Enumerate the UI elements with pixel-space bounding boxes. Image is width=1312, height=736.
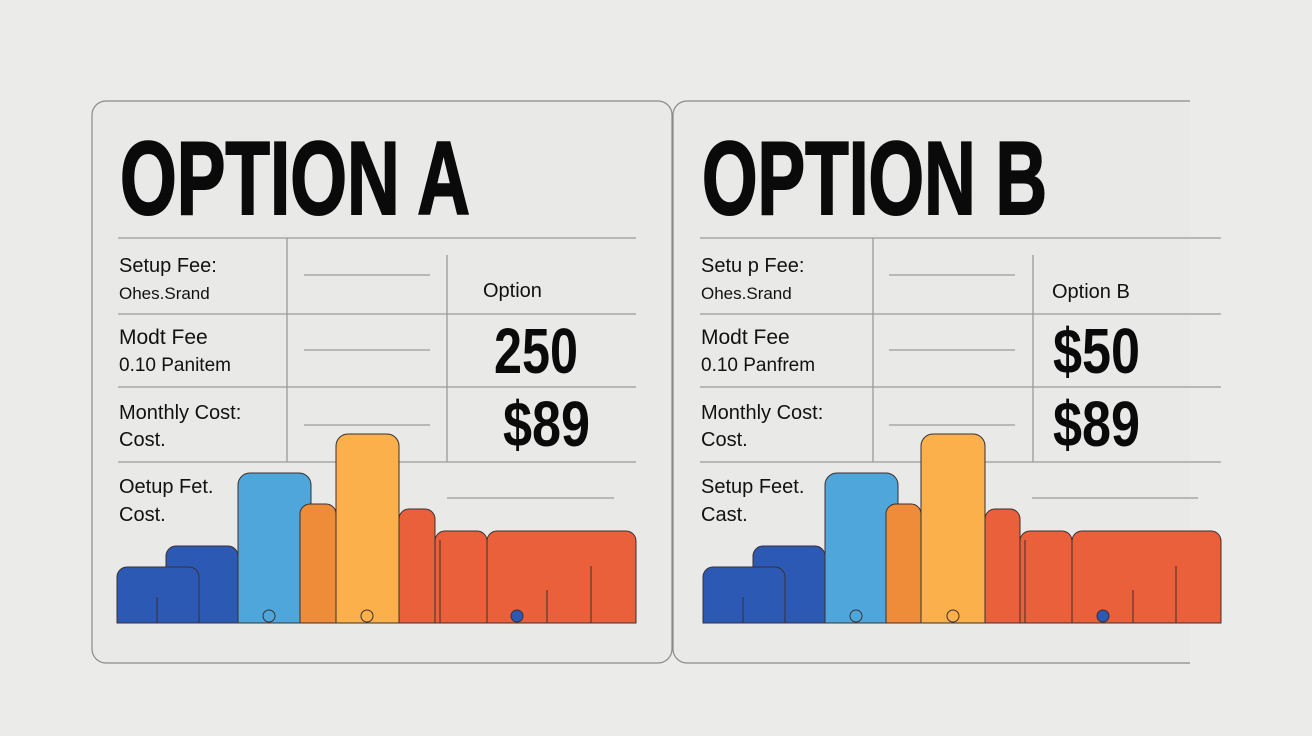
table B: Setup Feet. (701, 476, 804, 498)
table B: 0.10 Panfrem (701, 355, 815, 376)
table A: 0.10 Panitem (119, 355, 231, 376)
table B (700, 238, 1221, 526)
bar chart B (703, 434, 1221, 623)
table A: Cost. (119, 504, 166, 526)
table A: Monthly Cost: (119, 402, 241, 424)
table A: 250 (494, 315, 578, 387)
table A: Cost. (119, 429, 166, 451)
table B: Cast. (701, 504, 748, 526)
table A: Setup Fee: (119, 255, 217, 277)
table B: Option B (1052, 281, 1130, 303)
table A: Option (483, 280, 542, 302)
panel: option B (673, 101, 1221, 663)
table A: Oetup Fet. (119, 476, 214, 498)
table A: Modt Fee (119, 326, 208, 349)
title: OPTION B: OPTION B (702, 121, 1047, 237)
table B: Cost. (701, 429, 748, 451)
table A (118, 238, 636, 526)
table B: Monthly Cost: (701, 402, 823, 424)
title: OPTION A: OPTION A (120, 121, 470, 237)
table B: $50 (1053, 315, 1140, 387)
table A: Ohes.Srand (119, 284, 210, 303)
table B: $89 (1053, 388, 1140, 460)
table B: Ohes.Srand (701, 284, 792, 303)
table A: $89 (503, 388, 590, 460)
panel: option A (92, 101, 672, 663)
table B: Modt Fee (701, 326, 790, 349)
bar chart A (117, 434, 636, 623)
table B: Setu p Fee: (701, 255, 804, 277)
